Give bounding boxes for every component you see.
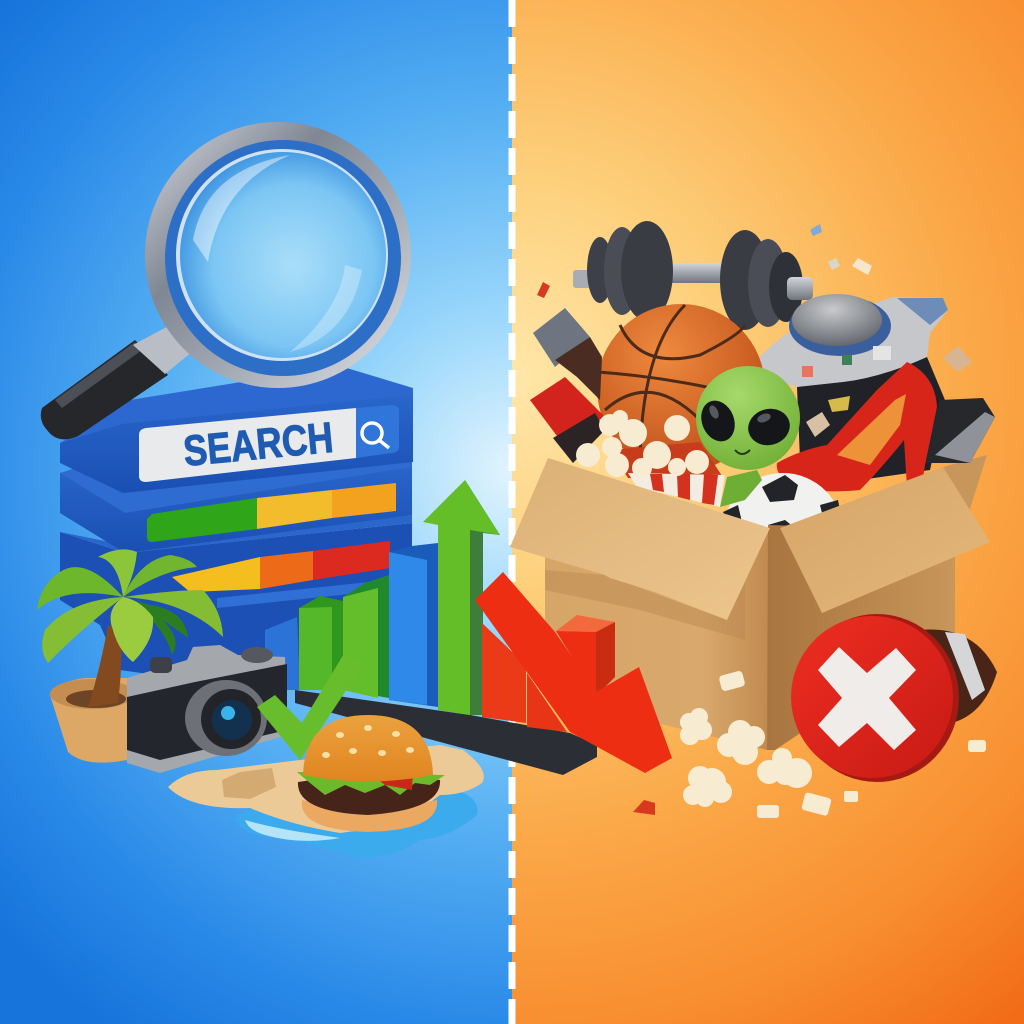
icon: lipstick xyxy=(530,308,605,463)
arrow: red down xyxy=(475,572,672,773)
icon: green check mark xyxy=(257,652,363,760)
icon: red high heel xyxy=(777,362,937,491)
bar chart: falling red bars xyxy=(475,572,672,773)
icon: UFO xyxy=(757,294,948,480)
icon: magnifying glass xyxy=(41,122,411,439)
dashed divider xyxy=(508,0,516,1024)
icon: cardboard box xyxy=(510,458,990,750)
icon: alien xyxy=(695,366,800,507)
sand and water puddle xyxy=(168,745,484,857)
box flap: left xyxy=(510,458,770,620)
quality meter: yellow to red xyxy=(172,541,390,592)
icon: soccer ball xyxy=(723,473,843,593)
book stack with search bar xyxy=(60,366,413,690)
arrow: green up xyxy=(423,480,500,715)
icon: football xyxy=(920,630,997,722)
search box: SEARCH xyxy=(181,414,335,476)
chart base xyxy=(295,690,597,775)
icon: red X badge xyxy=(791,614,959,782)
icon: sports shoe xyxy=(923,398,995,463)
panel: blue background xyxy=(0,0,512,1024)
panel: orange background xyxy=(512,0,1024,1024)
icon: mini magnifier xyxy=(362,423,389,448)
icon: palm tree in pot xyxy=(37,549,223,763)
icon: debris inside box xyxy=(806,396,850,437)
box flap: right xyxy=(780,467,990,613)
bar chart: rising bars xyxy=(265,480,597,775)
box back flap xyxy=(920,455,987,520)
icon: camera xyxy=(127,645,287,773)
icon: dumbbell xyxy=(573,221,813,330)
debris confetti xyxy=(537,224,972,815)
search box xyxy=(139,405,399,482)
quality meter: green to orange xyxy=(147,483,396,542)
icon: burger xyxy=(297,715,445,832)
icon: popcorn tub and popcorn xyxy=(576,410,725,507)
icon: basketball xyxy=(597,304,765,472)
popcorn scattered xyxy=(680,670,986,818)
